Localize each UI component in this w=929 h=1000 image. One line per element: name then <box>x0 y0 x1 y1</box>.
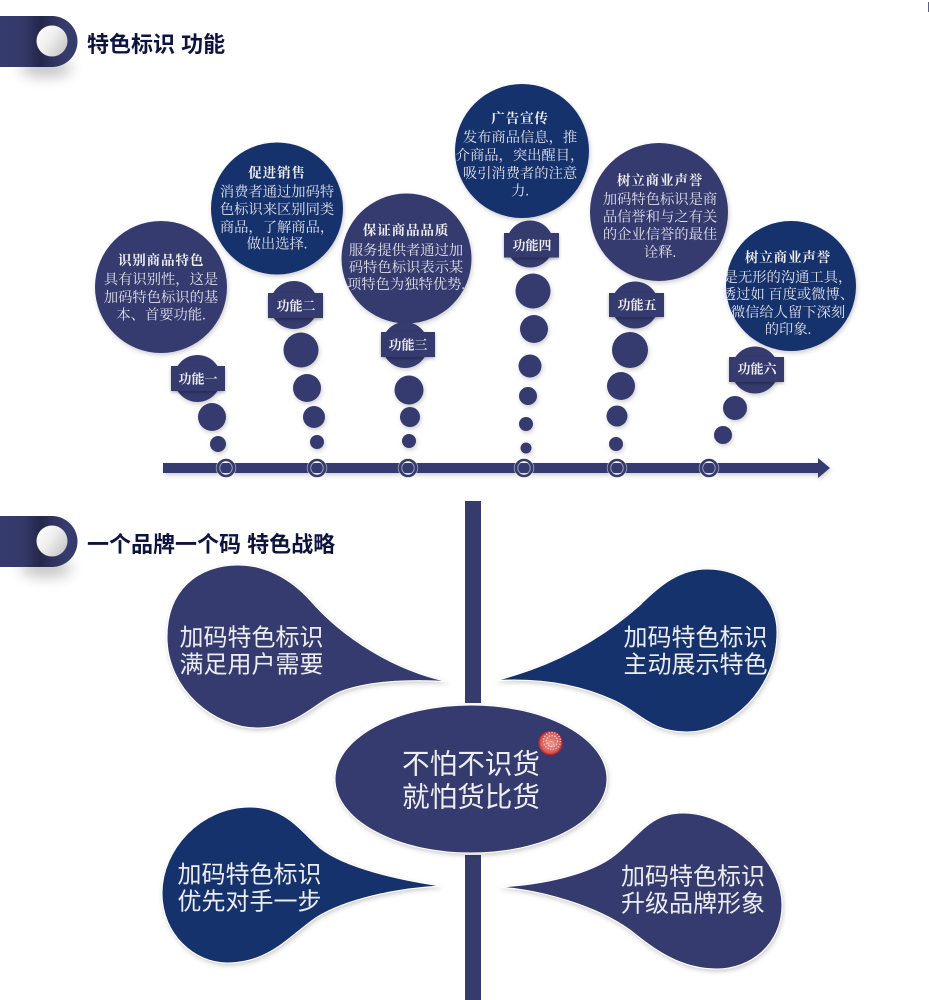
teardrop text <box>178 862 322 916</box>
bubble text <box>722 249 854 338</box>
teardrop text: 主动展示特色 <box>624 652 768 678</box>
center text <box>402 748 540 812</box>
center text: 就怕货比货 <box>402 782 540 812</box>
badge <box>609 282 664 328</box>
bubble text <box>603 172 717 261</box>
bubble text: 广告宣传 <box>491 110 549 126</box>
bubble text: 识别商品特色 <box>118 252 204 268</box>
panel: 功能五 <box>590 143 728 451</box>
header tab <box>0 16 78 67</box>
bubble <box>455 84 589 218</box>
badge <box>381 322 435 368</box>
header: 一个品牌一个码 特色战略 <box>0 516 335 577</box>
bubble text: 促进销售 <box>248 164 306 180</box>
header tab shadow <box>20 59 72 77</box>
teardrop text <box>180 624 324 678</box>
dots <box>714 396 747 444</box>
bubble text: 发布商品信息，推 <box>463 129 577 146</box>
bubble text <box>347 222 465 293</box>
dots <box>516 274 550 454</box>
bubble text: 品信誉和与之有关 <box>603 208 717 226</box>
panel: 功能四 <box>455 84 589 454</box>
bubble text: 项特色为独特优势. <box>347 275 465 293</box>
badge: 功能二 <box>276 298 316 314</box>
corner mark <box>928 2 929 12</box>
bubble text: 加码特色标识是商 <box>603 191 717 208</box>
bubble text: 做出选择. <box>247 234 307 252</box>
badge <box>504 220 559 268</box>
bubble text: 具有识别性，这是 <box>104 271 218 288</box>
teardrop: 主动展示特色 <box>496 569 777 732</box>
bubble text: 本、首要功能. <box>116 306 206 324</box>
bubble text: 消费者通过加码特 <box>220 182 334 200</box>
bubble text: 吸引消费者的注意 <box>463 164 578 182</box>
bubble text: 保证商品品质 <box>363 222 449 238</box>
bubble text: 介商品，突出醒目， <box>456 147 584 164</box>
badge: 功能四 <box>512 238 552 253</box>
bubble text <box>104 252 218 324</box>
teardrop text: 加码特色标识 <box>621 864 765 890</box>
bubble text <box>220 164 334 252</box>
badge <box>171 355 225 402</box>
bubble <box>342 194 472 324</box>
teardrop text: 优先对手一步 <box>178 888 322 916</box>
header tab <box>0 516 78 567</box>
panel: 功能二 <box>211 142 343 449</box>
bubble text: 树立商业声誉 <box>745 249 831 265</box>
bubble text: 是无形的沟通工具， <box>724 269 852 286</box>
header knob <box>36 26 68 56</box>
header tab shadow <box>20 559 72 577</box>
header knob <box>36 526 68 556</box>
bubble text: 透过如 百度或微博、 <box>722 285 854 303</box>
teardrop text: 升级品牌形象 <box>621 890 765 918</box>
panel: 功能六 <box>714 221 856 444</box>
header title: 一个品牌一个码 特色战略 <box>87 532 335 557</box>
bubble <box>95 221 227 353</box>
teardrop text: 加码特色标识 <box>178 862 322 888</box>
bubble text: 色标识来区别同类 <box>220 200 334 218</box>
header: 特色标识 功能 <box>0 16 225 77</box>
panel: 功能三 <box>342 194 472 448</box>
center ellipse <box>335 705 607 853</box>
vertical trunk <box>465 501 481 1000</box>
badge: 功能三 <box>388 338 428 352</box>
teardrop: 优先对手一步 <box>162 807 441 963</box>
bubble text <box>456 110 584 200</box>
dots <box>394 376 424 448</box>
bubble text: 服务提供者通过加 <box>349 241 463 259</box>
bubble text: 商品，了解商品， <box>220 219 334 236</box>
bubble text: 码特色标识表示某 <box>349 258 463 276</box>
timeline axis arrow <box>163 458 830 478</box>
teardrop: 升级品牌形象 <box>499 813 782 969</box>
dots <box>284 332 325 449</box>
teardrop text <box>621 864 765 918</box>
dots <box>606 332 648 451</box>
center text: 不怕不识货 <box>402 748 540 780</box>
dots <box>198 403 226 452</box>
bubble <box>590 143 728 281</box>
badge: 功能五 <box>617 298 657 312</box>
badge <box>729 346 784 394</box>
teardrop text: 加码特色标识 <box>180 624 324 652</box>
bubble text: 的企业信誉的最佳 <box>603 226 717 243</box>
bubble text: 的印象. <box>765 321 811 338</box>
header title: 特色标识 功能 <box>87 32 225 57</box>
bubble text: 树立商业声誉 <box>617 172 703 188</box>
bubble <box>726 221 856 351</box>
bubble text: 加码特色标识的基 <box>104 288 218 306</box>
badge <box>268 281 323 329</box>
panel: 功能一 <box>95 221 227 452</box>
teardrop: 满足用户需要 <box>167 565 447 728</box>
bubble <box>211 142 343 274</box>
badge: 功能六 <box>737 362 777 376</box>
bubble text: 力. <box>511 182 529 200</box>
teardrop text: 加码特色标识 <box>624 624 768 652</box>
icon: red seal <box>538 731 562 755</box>
badge: 功能一 <box>178 372 218 386</box>
teardrop text <box>624 624 768 678</box>
bubble text: 微信给人留下深刻 <box>731 304 845 321</box>
bubble text: 诠释. <box>644 244 676 261</box>
teardrop text: 满足用户需要 <box>180 652 324 678</box>
timeline rings <box>216 458 719 478</box>
